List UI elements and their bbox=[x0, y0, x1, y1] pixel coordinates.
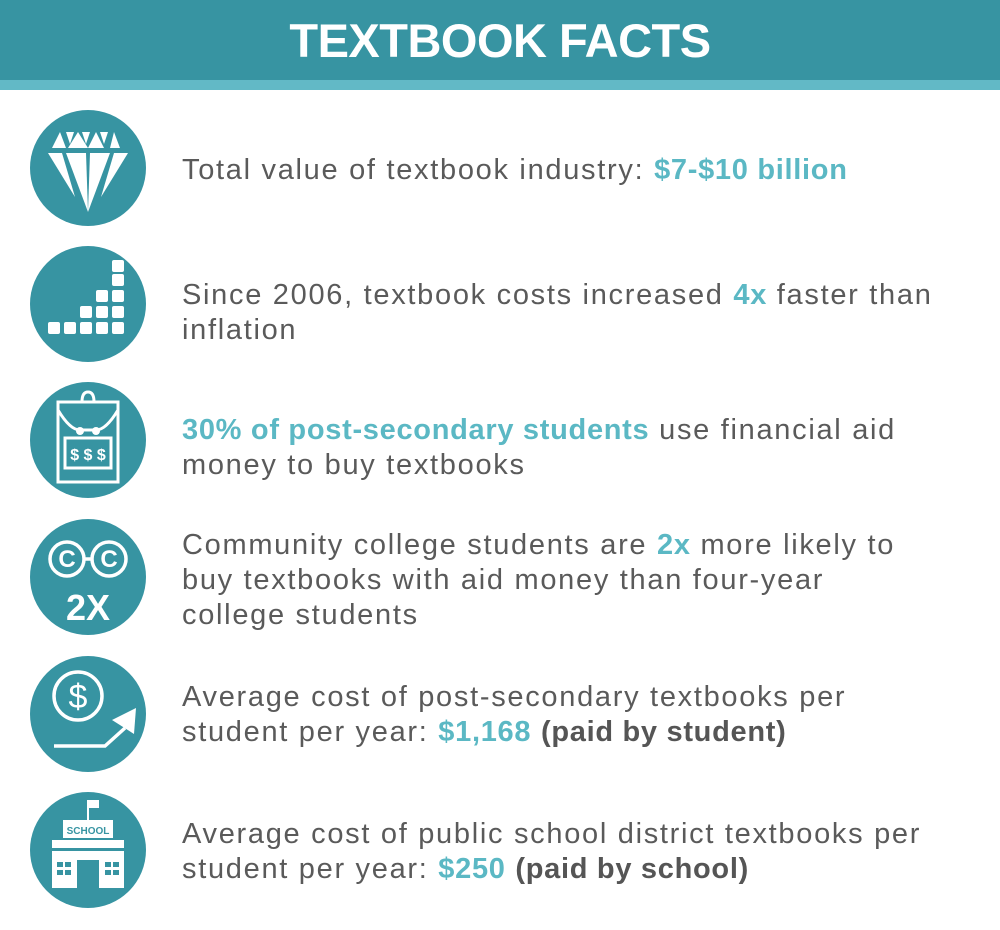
text: post-secondary cost: Average cost of post-secondary textbooks per bbox=[182, 681, 846, 713]
icon: dollar arrow: $ bbox=[69, 678, 88, 716]
text: industry value: Total value of textbook industry: $7-$10 billion bbox=[182, 154, 848, 186]
text: financial aid: 30% of post-secondary students use financial aid bbox=[182, 414, 896, 446]
text: cost increase: Since 2006, textbook costs increased 4x faster than bbox=[182, 279, 933, 311]
text: post-secondary cost: student per year: $1,168 (paid by student) bbox=[182, 716, 786, 748]
text: post-secondary cost bbox=[182, 681, 846, 748]
icon: bag with money: $ $ $ bbox=[70, 447, 106, 464]
text: financial aid: money to buy textbooks bbox=[182, 449, 526, 481]
text: cost increase bbox=[182, 279, 933, 346]
icon: diamond bbox=[30, 110, 146, 226]
text: community college: buy textbooks with aid money than four-year bbox=[182, 564, 824, 596]
header banner bbox=[0, 0, 1000, 80]
text: community college bbox=[182, 529, 895, 631]
text: public school cost: student per year: $250 (paid by school) bbox=[182, 853, 749, 885]
header banner: TEXTBOOK FACTS bbox=[289, 14, 711, 67]
text: public school cost: Average cost of public school district textbooks per bbox=[182, 818, 921, 850]
icon: school bbox=[30, 792, 146, 908]
icon: 2x: C bbox=[58, 546, 76, 573]
text: community college: college students bbox=[182, 599, 419, 631]
icon: bag with money bbox=[30, 382, 146, 498]
icon: rising blocks bbox=[30, 246, 146, 362]
text: public school cost bbox=[182, 818, 921, 885]
icon: 2x: 2X bbox=[66, 587, 110, 628]
icon: school: SCHOOL bbox=[67, 826, 109, 837]
icon: dollar arrow bbox=[30, 656, 146, 772]
text: cost increase: inflation bbox=[182, 314, 297, 346]
icon: 2x bbox=[30, 519, 146, 635]
text: financial aid bbox=[182, 414, 896, 481]
text: community college: Community college students are 2x more likely to bbox=[182, 529, 895, 561]
icon: 2x: C bbox=[100, 546, 118, 573]
